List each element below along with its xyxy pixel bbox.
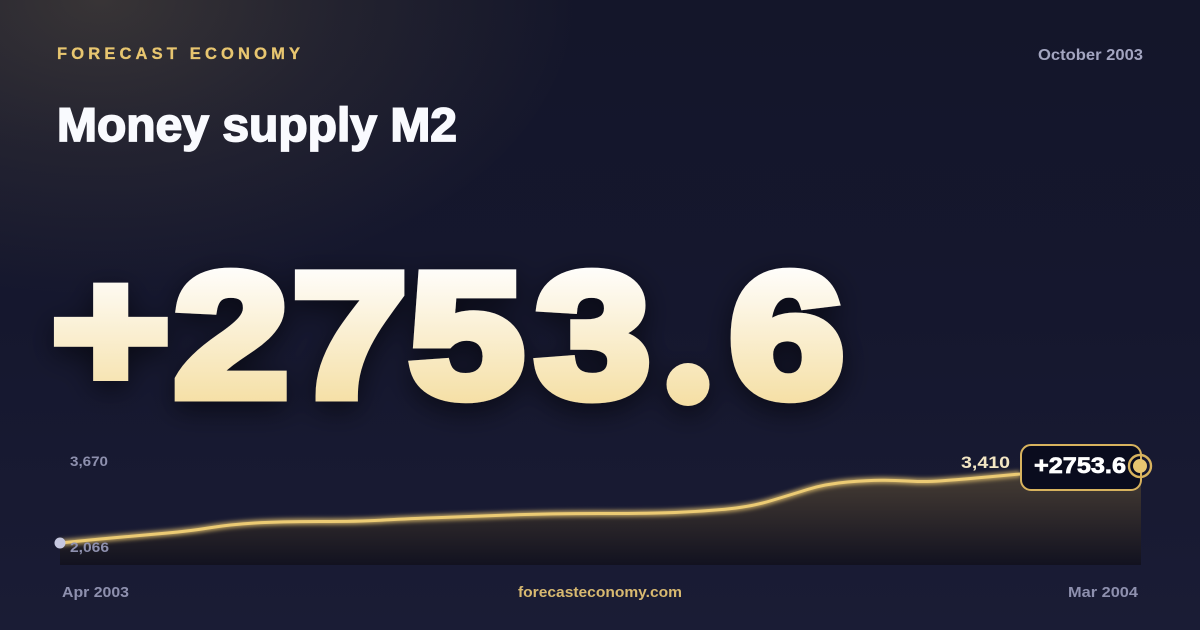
big headline value: 6 xyxy=(729,237,844,434)
website: forecasteconomy.com xyxy=(518,584,682,601)
big headline value: 2 xyxy=(174,237,289,434)
axis min label: 2,066 xyxy=(70,539,109,555)
big headline value: . xyxy=(659,237,717,434)
big headline value: + xyxy=(52,234,169,426)
latest value label: 3,410 xyxy=(961,453,1010,472)
x axis end label: Mar 2004 xyxy=(1068,584,1139,601)
x axis start label: Apr 2003 xyxy=(62,584,129,601)
area chart xyxy=(54,466,1141,565)
callout: latest change: +2753.6 xyxy=(1034,453,1126,478)
date label: October 2003 xyxy=(1038,47,1143,64)
start point marker xyxy=(54,538,66,548)
callout: latest change xyxy=(1021,445,1141,490)
line xyxy=(60,474,1020,543)
title: Money supply M2 xyxy=(57,98,457,151)
line glow xyxy=(60,474,1020,543)
area fill xyxy=(60,466,1141,565)
big headline value: 7 xyxy=(293,237,407,434)
big headline value: 5 xyxy=(409,237,524,434)
big headline value xyxy=(52,234,844,434)
eyebrow: brand name: FORECAST ECONOMY xyxy=(57,45,300,63)
big headline value: 3 xyxy=(536,237,650,434)
axis max label: 3,670 xyxy=(70,453,108,469)
end point marker xyxy=(1129,455,1151,477)
